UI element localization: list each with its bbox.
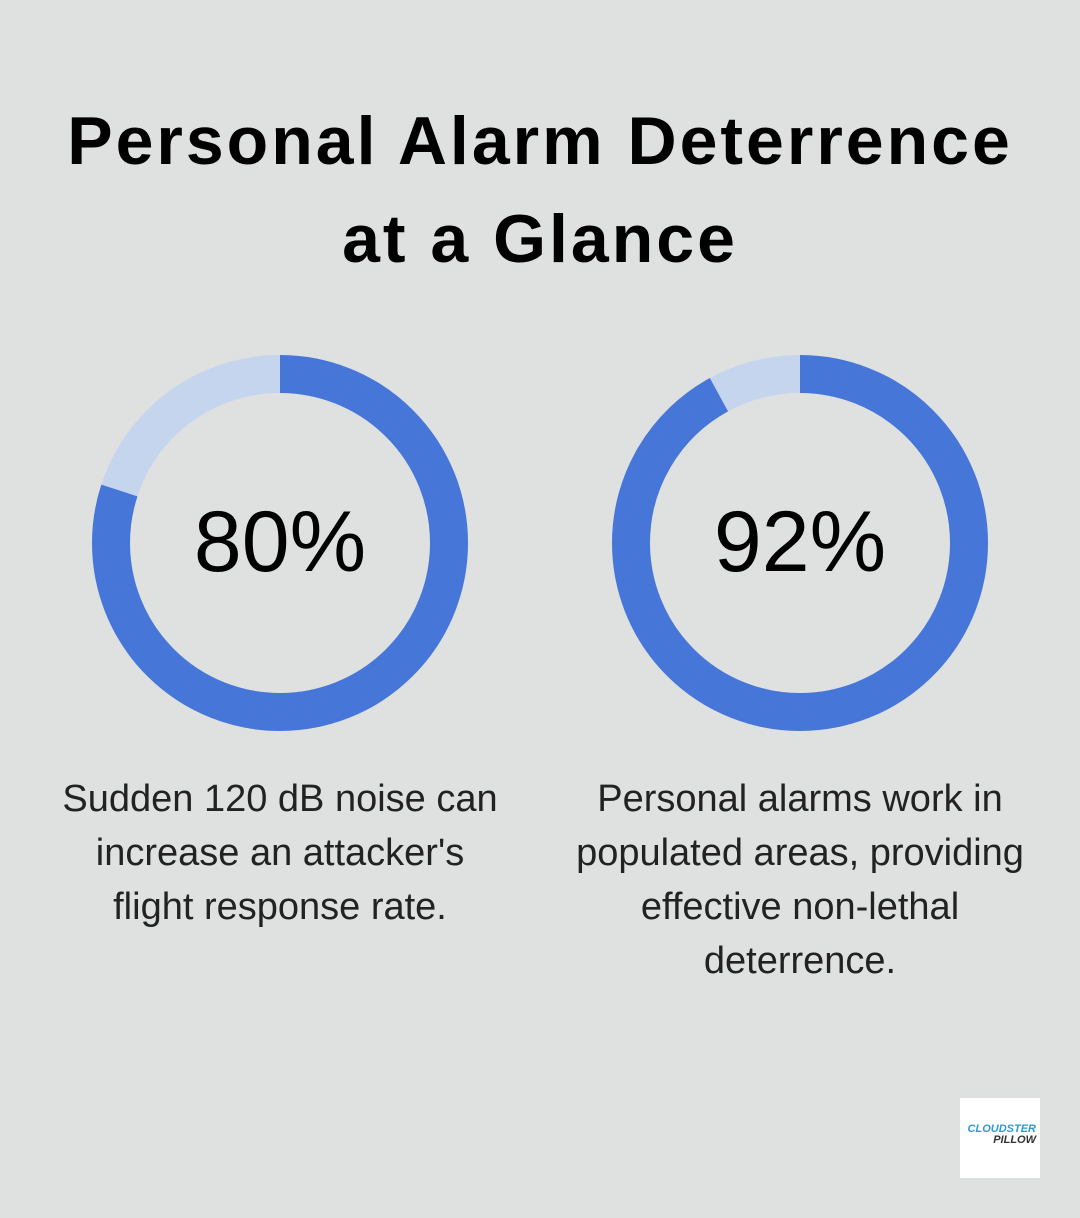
logo: PILLOW [993,1134,1036,1146]
logo: CLOUDSTER [968,1123,1036,1135]
caption left [62,778,498,928]
donut chart: 80%: 80% [194,494,366,590]
title: at a Glance [342,201,738,277]
title: Personal Alarm Deterrence [67,103,1013,179]
caption left: flight response rate. [113,886,447,928]
caption left: Sudden 120 dB noise can increase an attacker's [62,778,498,874]
donut chart: 80% [92,355,468,731]
caption right: Personal alarms work in populated areas, providing effective non-lethal deterrence. [576,778,1024,982]
donut chart: 92%: 92% [714,494,886,590]
logo [960,1098,1040,1178]
donut chart: 92% [612,355,988,731]
title [67,103,1013,277]
